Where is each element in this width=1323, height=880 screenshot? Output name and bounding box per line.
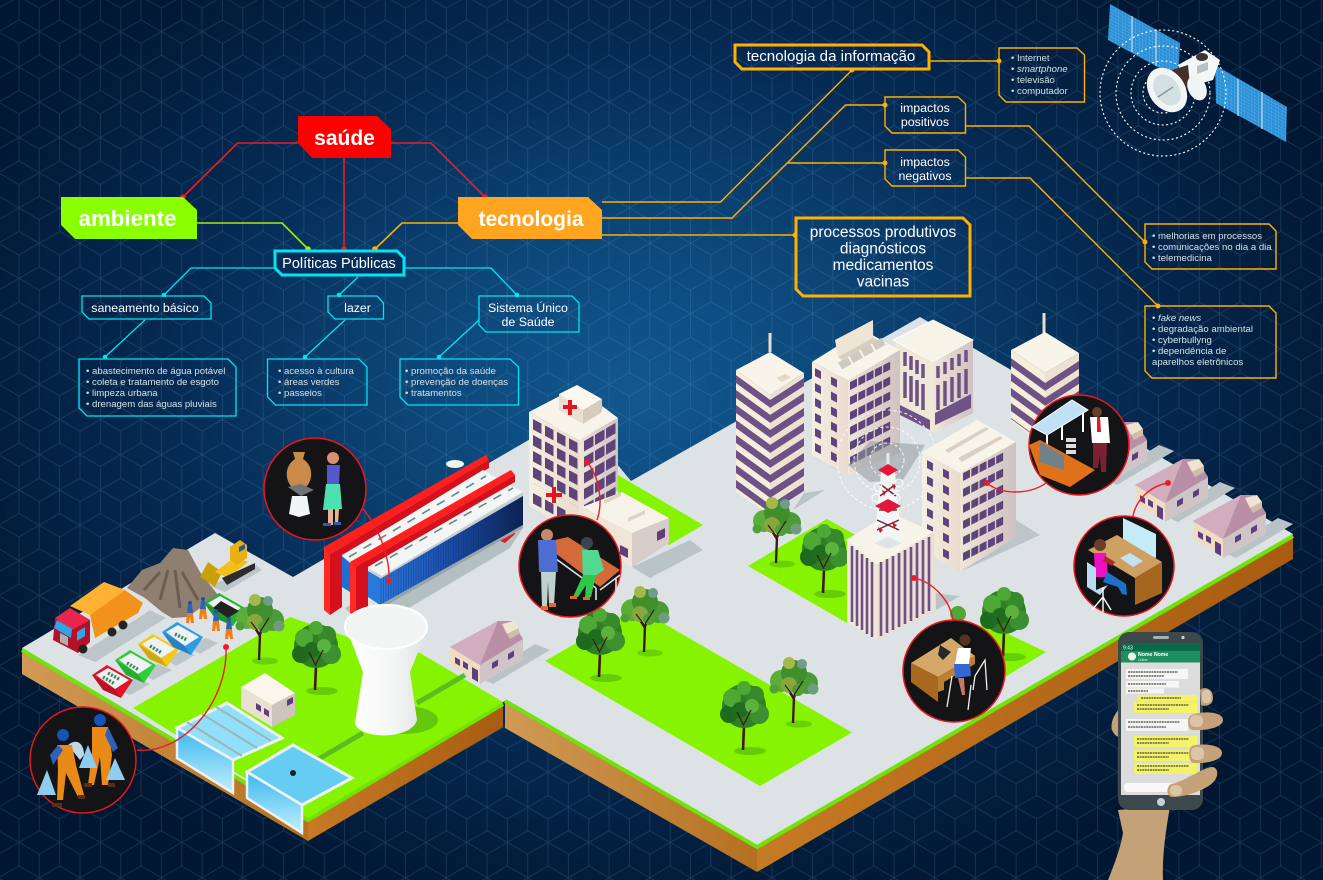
- front frame 1: [324, 455, 489, 555]
- hospital: [529, 385, 703, 578]
- museum: [324, 455, 523, 622]
- list: saneamento básico: • drenagem das águas pluviais: [86, 399, 217, 410]
- screen: Online: [1138, 658, 1148, 662]
- building: striped tower right: [1011, 313, 1079, 446]
- list: Sistema Único de Saúde: • prevenção de doenças: [405, 377, 508, 388]
- box: impactos positivos: positivos: [901, 115, 949, 129]
- amber connector lines: [602, 58, 1160, 308]
- box: impactos positivos: [885, 97, 966, 133]
- truck: [53, 582, 166, 662]
- pipe: [317, 675, 465, 760]
- blue wall: [368, 571, 380, 605]
- box: Sistema Único de Saúde: de Saúde: [501, 315, 555, 329]
- list: information technology: • smartphone: [1011, 64, 1068, 75]
- green area: central park: [545, 608, 852, 786]
- screen: [1121, 643, 1200, 795]
- box: tecnologia da informação: tecnologia da informação: [747, 48, 915, 65]
- circle: laboratory doctor: [1029, 395, 1129, 495]
- arm: [1108, 806, 1170, 880]
- box: lazer: [328, 296, 384, 319]
- list: information technology: • televisão: [1011, 75, 1055, 86]
- list: positive impacts: • telemedicina: [1152, 253, 1213, 264]
- bulldozer: [200, 540, 262, 592]
- box: impactos negativos: impactos: [900, 155, 950, 169]
- box: Sistema Único de Saúde: Sistema Único: [488, 300, 568, 315]
- cyan connector lines: [103, 268, 519, 359]
- list: Sistema Único de Saúde: • tratamentos: [405, 388, 462, 399]
- building: windows building back: [812, 320, 900, 475]
- connector lines from scenes to circles: [137, 459, 1171, 750]
- list: positive impacts: • comunicações no dia a dia: [1152, 242, 1272, 253]
- list: information technology: • Internet: [1011, 53, 1050, 64]
- list: negative impacts: aparelhos eletrônicos: [1152, 357, 1243, 368]
- tower: [529, 387, 618, 440]
- trees: central and right parks: [576, 586, 1029, 755]
- list: positive impacts: • melhorias em processos: [1152, 231, 1262, 242]
- left thumb: [1111, 707, 1127, 737]
- circle: telemedicine office: [1074, 516, 1174, 616]
- green area: hospital park: [618, 475, 703, 545]
- list: Sistema Único de Saúde: • promoção da saúde: [405, 366, 496, 377]
- heading: ambiente: ambiente: [79, 206, 176, 231]
- list: information technology: [999, 48, 1084, 102]
- list: saneamento básico: [79, 359, 236, 416]
- list: negative impacts: • degradação ambiental: [1152, 324, 1253, 335]
- telecom signal shadow and rings: [837, 410, 937, 510]
- screen: 9:43: [1123, 646, 1133, 652]
- list: information technology: • computador: [1011, 86, 1068, 97]
- box: processos produtivos: processos produtivos: [810, 224, 956, 241]
- box: tecnologia da informação: [735, 45, 929, 69]
- circle: museum visitor and vase: [264, 438, 366, 540]
- concept map: health, environment, technology: [61, 45, 1276, 416]
- waste area: [53, 540, 262, 698]
- tiny workers: [186, 597, 233, 639]
- list: lazer: [268, 359, 367, 405]
- smartphone held in hand: [1108, 632, 1223, 880]
- list: lazer: • acesso à cultura: [278, 366, 355, 377]
- list: negative impacts: [1145, 306, 1276, 378]
- roof 2: [368, 485, 523, 576]
- list: negative impacts: • cyberbullyng: [1152, 335, 1212, 346]
- green area: upper park: [748, 519, 900, 623]
- heading: tecnologia: [458, 197, 602, 239]
- building: striped tower left: [736, 333, 825, 515]
- list: negative impacts: • fake news: [1152, 313, 1201, 324]
- isometric city base plate: [22, 317, 1293, 872]
- box: Políticas Públicas: [275, 251, 404, 275]
- box: impactos negativos: negativos: [898, 169, 952, 183]
- building: back striped building: [893, 320, 973, 433]
- back wall: [342, 556, 350, 592]
- solar panels: [1108, 4, 1287, 142]
- box: processos produtivos: diagnósticos: [840, 240, 926, 258]
- screen: Nome Nome: [1138, 652, 1168, 658]
- list: saneamento básico: • limpeza urbana: [86, 388, 158, 399]
- circle: woman at desk: [903, 620, 1005, 722]
- heading: saúde: saúde: [314, 127, 375, 150]
- house left: [450, 621, 550, 684]
- frame 2: [350, 470, 515, 567]
- connector line: ambiente: [197, 223, 311, 252]
- dirt pile: [127, 548, 218, 618]
- green area: environment block: [133, 617, 503, 818]
- box: Políticas Públicas: Políticas Públicas: [282, 256, 396, 272]
- small dish: [1183, 72, 1211, 104]
- water treatment pool 1: [177, 703, 282, 793]
- fingers: [1167, 688, 1223, 797]
- connector lines: saúde: [180, 143, 488, 252]
- list: Sistema Único de Saúde: [400, 359, 518, 405]
- list: positive impacts: [1145, 224, 1276, 269]
- satellite body: [1178, 50, 1220, 87]
- box: processos produtivos: vacinas: [857, 274, 910, 290]
- list: saneamento básico: • abastecimento de água potável: [86, 366, 225, 377]
- box: saneamento básico: [82, 296, 211, 319]
- box: lazer: lazer: [344, 301, 371, 315]
- trees: environment block: [236, 594, 341, 695]
- list: negative impacts: • dependência de: [1152, 346, 1226, 357]
- box: Sistema Único de Saúde: [479, 296, 579, 332]
- water tower: [345, 605, 438, 735]
- telecom tower: [872, 453, 903, 549]
- building: office tower with vertical stripes: [846, 513, 960, 640]
- circle: waste workers: [30, 707, 136, 813]
- box: saneamento básico: saneamento básico: [91, 301, 199, 315]
- list: lazer: • áreas verdes: [278, 377, 340, 388]
- heading: ambiente: [61, 197, 197, 239]
- water treatment pool 2: [247, 745, 352, 833]
- large dish: [1138, 60, 1196, 120]
- green area: right park: [950, 623, 1046, 680]
- satellite: [1100, 4, 1287, 156]
- heading: tecnologia: tecnologia: [478, 208, 584, 231]
- recycling skips: [92, 593, 245, 698]
- box: processos produtivos: [796, 218, 970, 296]
- roof 1: [342, 470, 497, 563]
- heading: saúde: [298, 116, 391, 158]
- box: impactos negativos: [885, 150, 966, 186]
- box: processos produtivos: medicamentos: [833, 257, 934, 274]
- trees: upper park: [752, 497, 849, 598]
- list: lazer: • passeios: [278, 388, 322, 399]
- building: windows building right: [922, 420, 1040, 572]
- pump house: [241, 673, 295, 727]
- circle: doctor and patient on stretcher: [519, 515, 621, 617]
- box: impactos positivos: impactos: [900, 101, 950, 115]
- phone body: [1118, 632, 1203, 810]
- list: saneamento básico: • coleta e tratamento de esgoto: [86, 377, 219, 388]
- annex: [632, 540, 703, 578]
- signal rings: [1100, 30, 1226, 156]
- connector line: tecnologia: [372, 223, 458, 252]
- houses right: [1074, 422, 1293, 558]
